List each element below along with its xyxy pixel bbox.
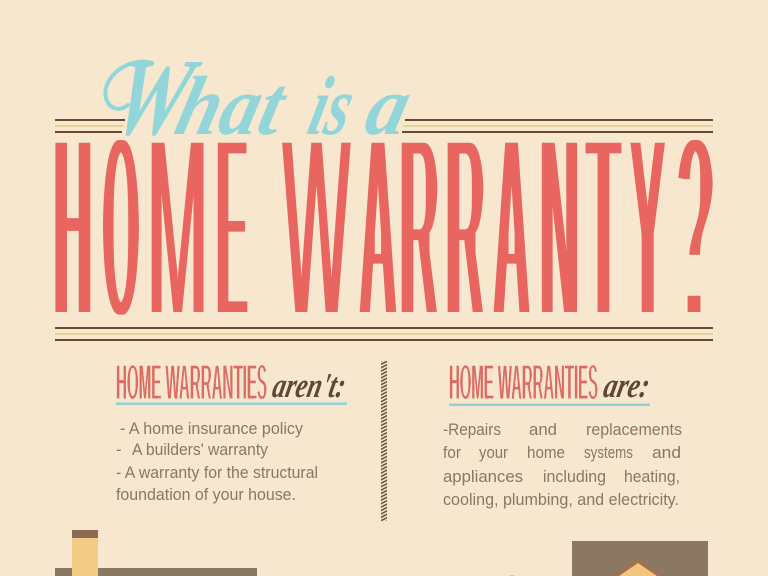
list: aren't items: foundation of your house. xyxy=(116,486,296,504)
paragraph: are description: systems xyxy=(584,444,633,462)
heading: HOME WARRANTY?: M xyxy=(148,73,207,381)
paragraph: are description: for xyxy=(443,444,461,462)
bottom triple rule xyxy=(55,328,713,340)
heading: HOME WARRANTY?: A xyxy=(493,73,530,380)
subheading: aren't: aren't: xyxy=(269,365,350,405)
hatched vertical divider xyxy=(381,361,387,521)
subheading: aren't xyxy=(116,354,350,412)
paragraph: are description: including xyxy=(543,468,606,486)
list: aren't items: A builders' warranty xyxy=(132,441,269,459)
paragraph: are description: your xyxy=(479,444,508,462)
heading: HOME WARRANTY?: T xyxy=(587,74,620,380)
illustration: small teal circle xyxy=(506,575,518,576)
paragraph: are description: cooling, plumbing, and electricity. xyxy=(443,491,679,509)
teal underline right xyxy=(449,404,650,406)
list: aren't items: - A home insurance policy xyxy=(120,420,304,438)
illustration: right house xyxy=(572,541,708,576)
paragraph: are description: -Repairs xyxy=(443,421,501,439)
paragraph: are description: replacements xyxy=(586,421,682,439)
heading: HOME WARRANTY?: E xyxy=(217,74,247,381)
paragraph: are description xyxy=(443,421,682,509)
teal underline left xyxy=(116,402,347,405)
paragraph: are description: heating, xyxy=(624,468,680,486)
heading: What is a: a xyxy=(357,60,420,153)
heading: HOME WARRANTY?: R xyxy=(446,73,484,380)
list: aren't items: - xyxy=(116,441,122,459)
heading: HOME WARRANTY?: O xyxy=(103,74,139,381)
illustration: left house roof and chimney xyxy=(55,530,257,576)
paragraph: are description: appliances xyxy=(443,468,523,486)
heading: What is a: W xyxy=(102,37,209,159)
list: aren't items xyxy=(116,420,318,504)
subheading: are xyxy=(449,354,654,412)
top triple rule xyxy=(55,120,713,132)
text: HOME WARRANTIES xyxy=(116,354,267,412)
heading: What is a xyxy=(102,37,420,159)
paragraph: are description: and xyxy=(529,421,557,439)
paragraph: are description: and xyxy=(652,444,681,462)
heading: HOME WARRANTY?: H xyxy=(54,73,92,380)
list: aren't items: - A warranty for the structural xyxy=(116,464,318,482)
heading: HOME WARRANTY?: W xyxy=(282,73,351,381)
heading: HOME WARRANTY? xyxy=(54,73,714,382)
heading: HOME WARRANTY?: ? xyxy=(676,74,714,381)
heading: HOME WARRANTY?: R xyxy=(400,73,438,380)
heading: What is a: hat xyxy=(167,60,297,153)
heading: HOME WARRANTY?: Y xyxy=(629,74,666,382)
panel: home warranties aren't xyxy=(116,354,350,504)
heading: What is a: is xyxy=(300,60,363,153)
subheading: are: are: xyxy=(600,365,654,405)
heading: HOME WARRANTY?: N xyxy=(540,73,579,380)
paragraph: are description: home xyxy=(527,444,565,462)
panel: home warranties are xyxy=(443,354,682,509)
heading: HOME WARRANTY?: A xyxy=(359,73,397,380)
